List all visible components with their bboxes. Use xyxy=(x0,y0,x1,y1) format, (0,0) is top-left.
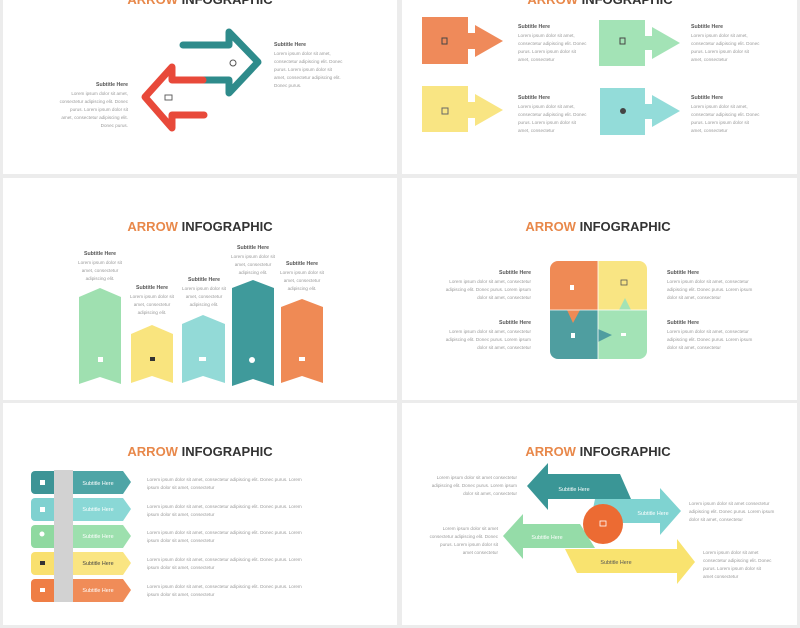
bar texts: Lorem ipsum dolor sit xyxy=(182,286,227,291)
arrow orange xyxy=(422,17,503,64)
bar texts: adipiscing elit. xyxy=(288,286,316,291)
icons xyxy=(442,38,447,44)
bar icons xyxy=(98,357,305,363)
panel: crossing arrows xyxy=(402,403,797,625)
title: ARROW INFOGRAPHIC xyxy=(525,444,671,459)
panel: puzzle square: Subtitle Here xyxy=(667,320,699,326)
bar texts: Lorem ipsum dolor sit xyxy=(78,260,123,265)
bar texts: adipiscing elit. xyxy=(86,276,114,281)
panel: crossing arrows: purus. Lorem ipsum dolor sit xyxy=(703,566,762,571)
panel: puzzle square: Lorem ipsum dolor sit amet, consectetur xyxy=(667,329,749,334)
icon: target xyxy=(230,60,236,66)
panel: four square arrows: amet, consectetur xyxy=(518,128,555,133)
bar texts: adipiscing elit. xyxy=(138,310,166,315)
panel: four square arrows xyxy=(402,0,797,174)
panel: crossing arrows: Lorem ipsum dolor sit amet consectetur xyxy=(689,501,770,506)
texts: amet, consectetur xyxy=(518,57,555,62)
texts: Subtitle Here xyxy=(518,24,550,30)
panel: list arrows xyxy=(3,403,397,625)
bar texts: Subtitle Here xyxy=(84,251,116,257)
panel: crossing arrows: Subtitle Here xyxy=(558,487,590,493)
text left: Donec purus. xyxy=(101,123,128,128)
bar texts: adipiscing elit. xyxy=(239,270,267,275)
panel: four square arrows: Subtitle Here xyxy=(691,95,723,101)
text left: amet, consectetur adipiscing elit. xyxy=(61,115,128,120)
panel: four square arrows: amet, consectetur xyxy=(691,57,728,62)
title: ARROW INFOGRAPHIC xyxy=(525,219,671,234)
bar texts xyxy=(78,245,325,315)
arrows xyxy=(590,488,681,535)
text left: consectetur adipiscing elit. Donec xyxy=(60,99,129,104)
panel: crossing arrows: adipiscing elit. Donec purus. Lorem ipsum xyxy=(689,509,774,514)
text right: Subtitle Here xyxy=(274,42,306,48)
bar texts: Subtitle Here xyxy=(286,261,318,267)
panel: crossing arrows: Lorem ipsum dolor sit amet xyxy=(703,550,759,555)
row texts: ipsum dolor sit amet, consectetur xyxy=(147,485,215,490)
panel: four square arrows: amet, consectetur xyxy=(691,128,728,133)
panel: four square arrows: consectetur adipiscing elit. Donec xyxy=(518,112,587,117)
puzzle texts: dolor sit amet, consectetur xyxy=(477,345,531,350)
panel: four square arrows: Lorem ipsum dolor sit amet, xyxy=(691,33,748,38)
text right: purus. Lorem ipsum dolor sit xyxy=(274,67,333,72)
text left xyxy=(60,82,129,128)
arrow texts: dolor sit amet, consectetur xyxy=(463,491,517,496)
puzzle texts: adipiscing elit. Donec purus. Lorem ipsum xyxy=(446,287,531,292)
arrow texts xyxy=(430,475,517,555)
panel: bar arrows xyxy=(3,178,397,400)
text right xyxy=(274,42,343,88)
title: ARROW INFOGRAPHIC xyxy=(127,444,273,459)
panel: puzzle square xyxy=(402,178,797,400)
puzzle xyxy=(550,261,647,359)
row texts: Lorem ipsum dolor sit amet, consectetur adipiscing elit. Donec purus. Lorem xyxy=(147,584,302,589)
bar texts: Subtitle Here xyxy=(136,285,168,291)
bar texts: amet, consectetur xyxy=(82,268,119,273)
icon: folder xyxy=(165,95,172,100)
bar texts: Subtitle Here xyxy=(237,245,269,251)
panel: four square arrows: purus. Lorem ipsum dolor sit xyxy=(691,120,750,125)
arrow texts: amet consectetur xyxy=(463,550,498,555)
panel: four square arrows: Lorem ipsum dolor sit amet, xyxy=(518,104,575,109)
row texts: Lorem ipsum dolor sit amet, consectetur adipiscing elit. Donec purus. Lorem xyxy=(147,557,302,562)
rows xyxy=(31,470,131,602)
arrow texts: consectetur adipiscing elit. Donec xyxy=(430,534,499,539)
title: ARROW INFOGRAPHIC xyxy=(127,219,273,234)
puzzle texts: adipiscing elit. Donec purus. Lorem ipsum xyxy=(446,337,531,342)
panel: puzzle square: adipiscing elit. Donec purus. Lorem ipsum xyxy=(667,337,752,342)
rows: Subtitle Here xyxy=(82,481,114,487)
row texts: Lorem ipsum dolor sit amet, consectetur adipiscing elit. Donec purus. Lorem xyxy=(147,477,302,482)
bar texts: amet, consectetur xyxy=(284,278,321,283)
panel: double arrow outline xyxy=(3,0,397,174)
bar texts: amet, consectetur xyxy=(134,302,171,307)
panel: four square arrows: purus. Lorem ipsum dolor sit xyxy=(518,120,577,125)
panel: four square arrows: Subtitle Here xyxy=(691,24,723,30)
panel: four square arrows: consectetur adipiscing elit. Donec xyxy=(691,112,760,117)
bar texts: adipiscing elit. xyxy=(190,302,218,307)
panel: four square arrows: Lorem ipsum dolor sit amet, xyxy=(691,104,748,109)
texts: consectetur adipiscing elit. Donec xyxy=(518,41,587,46)
panel: puzzle square: dolor sit amet, consectetur xyxy=(667,295,721,300)
panel: crossing arrows: Subtitle Here xyxy=(600,560,632,566)
panel: crossing arrows: Subtitle Here xyxy=(637,511,669,517)
text right: consectetur adipiscing elit. Donec xyxy=(274,59,343,64)
bars xyxy=(79,288,121,384)
puzzle texts: Subtitle Here xyxy=(499,320,531,326)
arrow yellow xyxy=(422,86,503,132)
bar texts: Subtitle Here xyxy=(188,277,220,283)
rows: Subtitle Here xyxy=(82,507,114,513)
arrow texts: Lorem ipsum dolor sit amet consectetur xyxy=(437,475,517,480)
panel: puzzle square: adipiscing elit. Donec purus. Lorem ipsum xyxy=(667,287,752,292)
row texts: ipsum dolor sit amet, consectetur xyxy=(147,538,215,543)
arrow green xyxy=(599,20,680,66)
bar texts: amet, consectetur xyxy=(235,262,272,267)
panel: crossing arrows: amet consectetur xyxy=(703,574,739,579)
rows: Subtitle Here xyxy=(82,561,114,567)
bar texts: amet, consectetur xyxy=(186,294,223,299)
panel: puzzle square: Lorem ipsum dolor sit amet, consectetur xyxy=(667,279,749,284)
panel: puzzle square: dolor sit amet, consectetur xyxy=(667,345,721,350)
arrow texts: adipiscing elit. Donec purus. Lorem ipsum xyxy=(432,483,517,488)
puzzle texts: Lorem ipsum dolor sit amet, consectetur xyxy=(449,279,531,284)
panel: crossing arrows: dolor sit amet, consectetur xyxy=(689,517,743,522)
panel: puzzle square: Subtitle Here xyxy=(667,270,699,276)
arrow texts: Lorem ipsum dolor sit amet xyxy=(443,526,499,531)
teal outline arrow xyxy=(183,32,258,93)
rows: Subtitle Here xyxy=(82,588,114,594)
panel: four square arrows: consectetur adipiscing elit. Donec xyxy=(691,41,760,46)
texts: Lorem ipsum dolor sit amet, xyxy=(518,33,575,38)
puzzle texts: Lorem ipsum dolor sit amet, consectetur xyxy=(449,329,531,334)
text right: Donec purus. xyxy=(274,83,301,88)
row texts: ipsum dolor sit amet, consectetur xyxy=(147,512,215,517)
text left: Subtitle Here xyxy=(96,82,128,88)
rows: Subtitle Here xyxy=(82,534,114,540)
row texts: Lorem ipsum dolor sit amet, consectetur adipiscing elit. Donec purus. Lorem xyxy=(147,530,302,535)
text right: Lorem ipsum dolor sit amet, xyxy=(274,51,331,56)
puzzle texts: dolor sit amet, consectetur xyxy=(477,295,531,300)
row texts xyxy=(147,477,302,597)
puzzle texts: Subtitle Here xyxy=(499,270,531,276)
bar texts: Lorem ipsum dolor sit xyxy=(231,254,276,259)
arrow light teal xyxy=(600,88,680,135)
puzzle texts xyxy=(446,270,531,350)
text right: amet, consectetur adipiscing elit. xyxy=(274,75,341,80)
text left: purus. Lorem ipsum dolor sit xyxy=(70,107,129,112)
panel: four square arrows: purus. Lorem ipsum dolor sit xyxy=(691,49,750,54)
texts xyxy=(518,24,587,62)
bar texts: Lorem ipsum dolor sit xyxy=(130,294,175,299)
panel: four square arrows: Subtitle Here xyxy=(518,95,550,101)
arrow texts: purus. Lorem ipsum dolor sit xyxy=(440,542,499,547)
red outline arrow xyxy=(145,67,204,128)
panel: crossing arrows: consectetur adipiscing elit. Donec xyxy=(703,558,772,563)
bar texts: Lorem ipsum dolor sit xyxy=(280,270,325,275)
row texts: ipsum dolor sit amet, consectetur xyxy=(147,565,215,570)
row texts: ipsum dolor sit amet, consectetur xyxy=(147,592,215,597)
row texts: Lorem ipsum dolor sit amet, consectetur adipiscing elit. Donec purus. Lorem xyxy=(147,504,302,509)
panel: crossing arrows: Subtitle Here xyxy=(531,535,563,541)
texts: purus. Lorem ipsum dolor sit xyxy=(518,49,577,54)
text left: Lorem ipsum dolor sit amet, xyxy=(71,91,128,96)
